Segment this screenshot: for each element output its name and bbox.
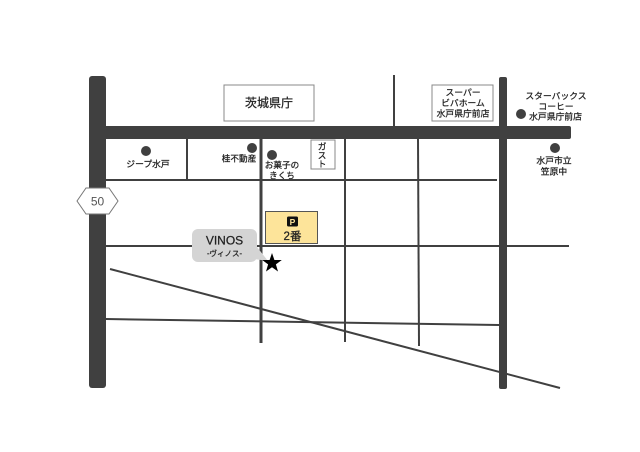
route 50 sign: 50 (91, 194, 104, 208)
label: 茨城県庁 (224, 85, 314, 121)
callout: VINOS: VINOS (206, 234, 243, 248)
callout: VINOS: -ヴィノス- (207, 248, 242, 258)
parking 2番: P (290, 217, 296, 227)
label: スターバックス: コーヒー (538, 102, 574, 112)
label: スーパー ビバホーム: スーパー (445, 88, 481, 98)
label: 茨城県庁: 茨城県庁 (245, 96, 293, 110)
label: スターバックス: スターバックス (525, 91, 587, 101)
route 50 sign (77, 188, 118, 214)
label: お菓子のきくち: きくち (269, 170, 295, 180)
main road: horizontal (100, 126, 571, 139)
callout: VINOS (192, 229, 268, 262)
label: ガスト: ス (318, 150, 326, 160)
main road: left vertical (89, 76, 106, 388)
label: ガスト: ト (318, 159, 326, 169)
label: ガスト: ガ (318, 142, 327, 152)
label: スターバックス (516, 91, 587, 122)
label: 水戸市立笠原中 (536, 143, 572, 176)
label: 桂不動産 (222, 143, 257, 164)
label: お菓子のきくち (265, 150, 299, 180)
label: お菓子のきくち: お菓子の (265, 159, 299, 170)
label: ジープ水戸: ジープ水戸 (126, 158, 170, 169)
label: 水戸市立笠原中: 笠原中 (541, 166, 567, 176)
thin streets (106, 75, 569, 388)
icon: star location (262, 253, 282, 272)
parking 2番: 2番 (284, 230, 302, 243)
parking 2番 (266, 212, 318, 244)
label: 水戸市立笠原中: 水戸市立 (536, 154, 572, 166)
label: スーパー ビバホーム: 水戸県庁前店 (437, 108, 490, 118)
label: スーパー ビバホーム: ビバホーム (441, 98, 485, 108)
label: スーパー ビバホーム (432, 85, 493, 121)
label: ガスト (311, 140, 335, 169)
main road: right vertical (499, 77, 507, 389)
label: ジープ水戸 (126, 146, 170, 169)
label: スターバックス: 水戸県庁前店 (529, 110, 582, 122)
label: 桂不動産: 桂不動産 (222, 152, 257, 164)
